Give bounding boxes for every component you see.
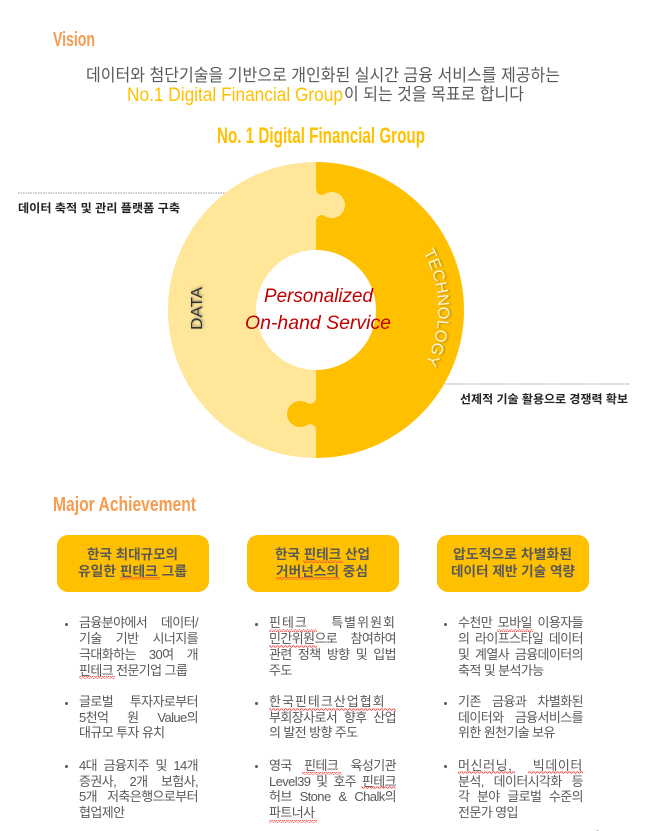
bullet list: column 1: 기술 기반 시너지를 xyxy=(79,631,198,646)
bullet list: column 2: 의 발전 방향 주도 xyxy=(269,725,358,740)
vision statement xyxy=(86,66,560,106)
card header 3 xyxy=(437,535,589,592)
bullet list: column 3: 기존 금융과 차별화된 xyxy=(458,694,583,709)
bullet list: column 3: 각 분야 글로벌 수준의 xyxy=(458,789,583,804)
bullet list: column 1: 극대화하는 30여 개 xyxy=(79,647,198,662)
puzzle tab: data xyxy=(316,188,345,222)
bullet list: column 2: 한국핀테크산업협회 xyxy=(269,694,386,709)
center text: On-hand Service xyxy=(245,313,391,334)
bullet list: column 2: 영국 핀테크 육성기관 xyxy=(269,758,396,773)
center text xyxy=(245,286,391,334)
callout: data platform: 데이터 축적 및 관리 플랫폼 구축 xyxy=(18,201,180,215)
bullet list: column 1: 대규모 투자 유치 xyxy=(79,725,165,740)
bullet list: column 3: 의 라이프스타일 데이터 xyxy=(458,631,583,646)
bullet list: column 3: 전문가 영입 xyxy=(458,805,518,820)
bullet list: column 1: 글로벌 투자자로부터 xyxy=(79,694,198,709)
bullet list: column 2 xyxy=(255,615,396,820)
puzzle tab: technology xyxy=(287,397,316,431)
bullet list: column 3: 수천만 모바일 이용자들 xyxy=(458,615,583,630)
vision statement: 이 되는 것을 목표로 합니다 xyxy=(344,85,524,104)
bullet list: column 1: 협업제안 xyxy=(79,805,124,820)
card header 2: 거버넌스의 중심 xyxy=(276,564,368,579)
bullet list: column 1 xyxy=(65,615,199,820)
bullet list: column 2: 파트너사 xyxy=(269,805,314,820)
card header 3: 데이터 제반 기술 역량 xyxy=(451,564,576,579)
bullet list: column 1: 금융분야에서 데이터/ xyxy=(79,615,198,630)
diagram title: No. 1 Digital Financial Group xyxy=(217,123,425,148)
puzzle piece: data half xyxy=(168,162,316,458)
bullet list: column 3: 및 계열사 금융데이터의 xyxy=(458,647,583,662)
bullet list: column 1: 핀테크 전문기업 그룹 xyxy=(79,663,187,678)
card header 3: 압도적으로 차별화된 xyxy=(453,547,572,562)
bullet list: column 1: 5개 저축은행으로부터 xyxy=(79,789,198,804)
bullet list: column 3: 분석, 데이터시각화 등 xyxy=(458,774,583,789)
bullet list: column 1: 5천억 원 Value의 xyxy=(79,710,198,725)
card header 1: 유일한 핀테크 그룹 xyxy=(78,564,187,579)
center text: Personalized xyxy=(264,286,374,307)
bullet list: column 3: 축적 및 분석가능 xyxy=(458,663,544,678)
puzzle ring diagram xyxy=(168,162,464,458)
puzzle piece: technology half xyxy=(316,162,464,458)
card header 2: 한국 핀테크 산업 xyxy=(275,547,370,562)
card header 2 xyxy=(247,535,399,592)
bullet list: column 2: 핀테크 특별위원회 xyxy=(269,615,396,630)
bullet list: column 1: 증권사, 2개 보험사, xyxy=(79,774,198,789)
bullet list: column 2: 주도 xyxy=(269,663,292,678)
label: DATA: DATA xyxy=(189,287,206,330)
card header 1 xyxy=(57,535,209,592)
bullet list: column 1: 4대 금융지주 및 14개 xyxy=(79,758,198,773)
callout: technology: 선제적 기술 활용으로 경쟁력 확보 xyxy=(460,392,628,406)
heading: Vision: Vision xyxy=(53,29,95,51)
bullet list: column 2: 관련 정책 방향 및 입법 xyxy=(269,647,396,662)
vision statement: No.1 Digital Financial Group xyxy=(127,85,343,106)
bullet list: column 3: 위한 원천기술 보유 xyxy=(458,725,555,740)
bullet list: column 2: Level39 및 호주 핀테크 xyxy=(269,774,396,789)
bullet list: column 3 xyxy=(444,615,583,820)
card header 1: 한국 최대규모의 xyxy=(87,547,178,562)
label: TECHNOLOGY: TECHNOLOGY xyxy=(425,247,452,368)
bullet list: column 2: 부회장사로서 향후 산업 xyxy=(269,710,396,725)
bullet list: column 2: 허브 Stone & Chalk의 xyxy=(269,789,396,804)
vision statement: 데이터와 첨단기술을 기반으로 개인화된 실시간 금융 서비스를 제공하는 xyxy=(86,66,560,85)
bullet list: column 3: 머신러닝, 빅데이터 xyxy=(458,758,583,773)
bullet list: column 2: 민간위원으로 참여하여 xyxy=(269,631,396,646)
bullet list: column 3: 데이터와 금융서비스를 xyxy=(458,710,583,725)
heading: Major Achievement: Major Achievement xyxy=(53,494,196,516)
